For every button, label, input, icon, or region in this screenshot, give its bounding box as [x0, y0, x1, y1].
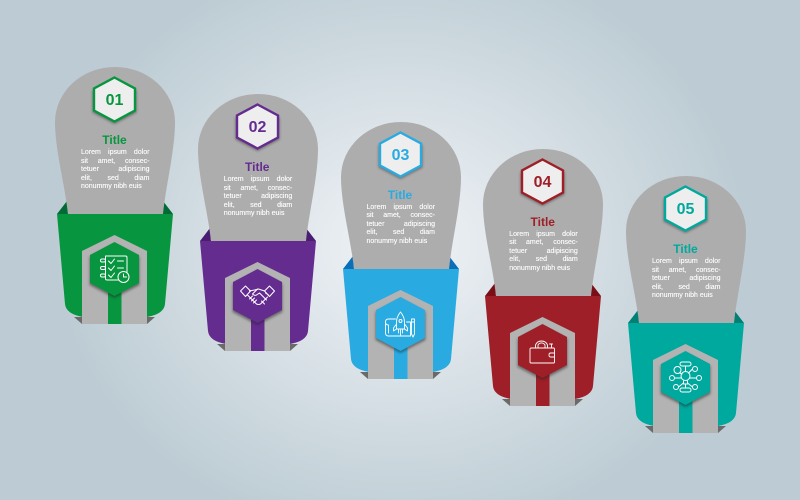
- text block: elit, sed diam: [224, 202, 292, 209]
- title: Title: [388, 188, 412, 202]
- number hexagon: 01: [106, 92, 124, 109]
- text block: sit amet, consec-: [652, 266, 720, 274]
- pocket: red: [485, 283, 601, 406]
- text block: sit amet, consec-: [509, 239, 578, 246]
- number hexagon: [378, 132, 422, 178]
- text block: tetuer adipiscing: [224, 193, 292, 200]
- text block: sit amet, consec-: [81, 158, 150, 164]
- icon: rocket on blueprint: [385, 312, 414, 336]
- icon: wallet with coin: [530, 341, 555, 363]
- text block: Lorem ipsum dolor: [366, 204, 435, 210]
- dome: [340, 122, 460, 268]
- pocket: blue: [342, 256, 458, 378]
- text block: Lorem ipsum dolor: [81, 149, 150, 156]
- icon: idea network: [670, 362, 702, 392]
- icon hexagon: [375, 296, 425, 352]
- pocket: green: [57, 201, 173, 324]
- dome: [198, 94, 318, 241]
- panel: step 04 red: [483, 149, 603, 406]
- text block: [224, 176, 292, 217]
- icon hexagon: [518, 324, 568, 380]
- text block: tetuer adipiscing: [652, 275, 720, 282]
- title: Title: [531, 215, 555, 229]
- text block: tetuer adipiscing: [81, 166, 150, 173]
- ribbon strip: [368, 290, 432, 378]
- ribbon strip: [510, 317, 575, 406]
- number hexagon: 04: [534, 174, 552, 191]
- pocket: purple: [200, 228, 316, 351]
- text block: tetuer adipiscing: [509, 248, 578, 255]
- text block: elit, sed diam: [366, 229, 435, 236]
- text block: sit amet, consec-: [224, 185, 292, 192]
- text block: Lorem ipsum dolor: [224, 176, 292, 183]
- title: Title: [102, 133, 127, 147]
- number hexagon: [664, 186, 708, 233]
- panel: step 03 blue: [341, 122, 461, 379]
- title: Title: [673, 242, 698, 256]
- icon hexagon: [660, 351, 710, 407]
- panel: step 02 purple: [198, 94, 318, 351]
- text block: [81, 148, 150, 190]
- number hexagon: 03: [391, 146, 409, 164]
- pocket: teal: [628, 310, 744, 433]
- number hexagon: [235, 105, 279, 151]
- text block: nonummy nibh euis: [509, 265, 570, 272]
- dome: [626, 176, 746, 323]
- text block: nonummy nibh euis: [652, 292, 713, 299]
- dome: [483, 149, 603, 296]
- text block: tetuer adipiscing: [366, 220, 435, 228]
- text block: elit, sed diam: [81, 174, 150, 182]
- text block: [509, 230, 578, 272]
- panel: step 05 teal: [626, 176, 746, 433]
- text block: Lorem ipsum dolor: [652, 258, 720, 265]
- ribbon strip: [82, 235, 147, 324]
- ribbon strip: [653, 344, 718, 433]
- number hexagon: [521, 159, 565, 206]
- text block: nonummy nibh euis: [81, 183, 142, 190]
- text block: [652, 258, 720, 299]
- text block: [366, 204, 435, 244]
- number hexagon: [92, 78, 136, 124]
- text block: elit, sed diam: [509, 256, 578, 263]
- text block: Lorem ipsum dolor: [509, 231, 578, 238]
- number hexagon: 02: [248, 119, 266, 136]
- text block: elit, sed diam: [652, 284, 720, 290]
- icon hexagon: [232, 269, 282, 325]
- title: Title: [245, 160, 269, 174]
- icon hexagon: [90, 242, 140, 298]
- panel: step 01 green: [55, 67, 175, 324]
- text block: nonummy nibh euis: [366, 238, 427, 244]
- dome: [55, 67, 175, 214]
- ribbon strip: [225, 262, 290, 351]
- icon: handshake: [240, 286, 274, 305]
- icon: checklist with clock: [100, 256, 129, 282]
- text block: sit amet, consec-: [366, 212, 435, 219]
- number hexagon: 05: [677, 201, 694, 218]
- text block: nonummy nibh euis: [224, 210, 284, 217]
